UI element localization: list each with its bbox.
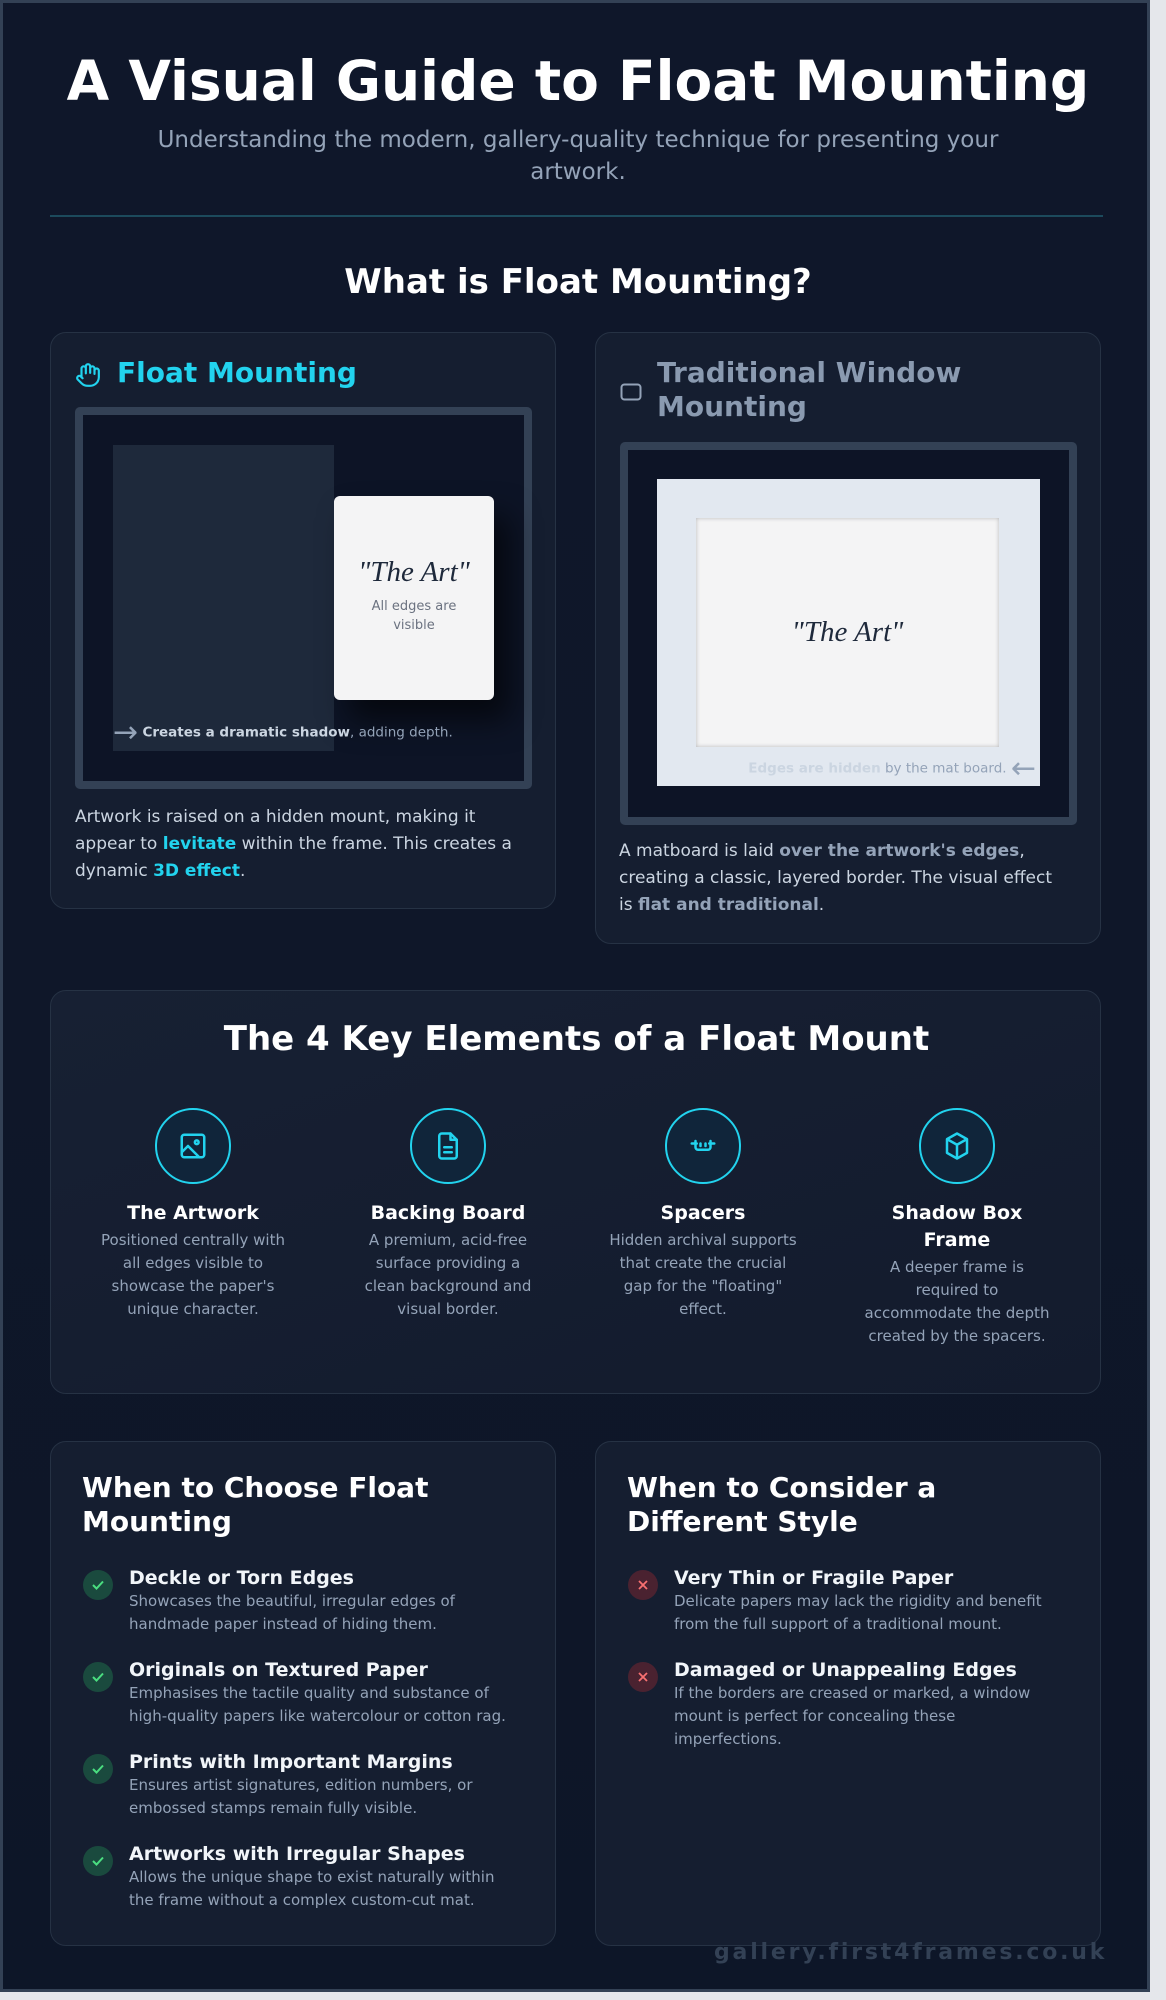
item: irregular (83, 1843, 494, 1909)
arrow label: Edges are hidden by the mat board. ← (748, 751, 1036, 786)
heading: what is float mounting: What is Float Mounting? (344, 262, 812, 302)
subtitle: Understanding the modern, gallery-quality technique for presenting your artwork. (158, 127, 998, 185)
icon: hand (76, 363, 100, 387)
element: spacers: Hidden archival supports that create the crucial gap for the "floating" effect. (609, 1231, 797, 1318)
element: artwork: The Artwork (127, 1202, 259, 1224)
art card (334, 496, 494, 700)
item: thin paper (628, 1567, 1042, 1633)
element: artwork: Positioned centrally with all edges visible to showcase the paper's unique character. (101, 1231, 285, 1318)
panel: float mounting (50, 332, 556, 909)
panel: consider different style (595, 1441, 1101, 1946)
item: thin paper: Very Thin or Fragile Paper (674, 1567, 953, 1589)
panel: traditional window mounting (595, 332, 1101, 944)
item: damaged edges: Damaged or Unappealing Edges (674, 1659, 1017, 1681)
item: damaged edges (628, 1659, 1030, 1748)
item: deckle (83, 1567, 456, 1633)
heading: traditional: Traditional Window (657, 356, 961, 389)
element: spacers: Spacers (661, 1202, 745, 1224)
text block: Artwork is raised on a hidden mount, making it appear to levitate within the frame. This creates a dynamic 3D effect. (75, 807, 512, 881)
heading: float mounting: Float Mounting (117, 356, 357, 389)
item: deckle: Showcases the beautiful, irregular edges of handmade paper instead of hiding them. (129, 1592, 455, 1633)
element: backing board: A premium, acid-free surface providing a clean background and visual border. (365, 1231, 531, 1318)
item: irregular: Artworks with Irregular Shapes (129, 1843, 465, 1865)
item: irregular: Allows the unique shape to exist naturally within the frame without a complex custom-cut mat. (129, 1868, 494, 1909)
item: margins (83, 1751, 473, 1817)
diagram: float frame (75, 407, 532, 789)
diagram: window frame: "The Art" (792, 616, 903, 648)
heading (82, 1471, 428, 1538)
footer: gallery.first4frames.co.uk (714, 1940, 1107, 1965)
item: margins: Prints with Important Margins (129, 1751, 453, 1773)
element: spacers (609, 1108, 797, 1318)
art card: All edges are (372, 599, 456, 614)
heading: traditional: Mounting (657, 390, 807, 423)
element: shadow box frame: A deeper frame is required to accommodate the depth created by the spacers. (865, 1258, 1049, 1345)
item: margins: Ensures artist signatures, edition numbers, or embossed stamps remain fully visible. (129, 1776, 472, 1817)
item: thin paper: Delicate papers may lack the rigidity and benefit from the full support of a traditional mount. (674, 1592, 1042, 1633)
title: A Visual Guide to Float Mounting (67, 49, 1089, 113)
element: backing board (365, 1108, 531, 1318)
item: textured (83, 1659, 506, 1725)
panel: when to choose (50, 1441, 556, 1946)
element: shadow box frame: Frame (924, 1229, 990, 1251)
heading: Different Style (627, 1505, 858, 1538)
diagram: window frame (620, 442, 1077, 825)
item: textured: Originals on Textured Paper (129, 1659, 428, 1681)
item: textured: Emphasises the tactile quality and substance of high-quality papers like watercolour or cotton rag. (129, 1684, 506, 1725)
element: artwork (101, 1108, 285, 1318)
heading: Mounting (82, 1505, 232, 1538)
art card: "The Art" (358, 556, 470, 588)
heading (627, 1471, 936, 1538)
arrow label: → Creates a dramatic shadow, adding depth. (113, 715, 453, 750)
item: deckle: Deckle or Torn Edges (129, 1567, 354, 1589)
panel: key elements (50, 990, 1101, 1394)
heading: The 4 Key Elements of a Float Mount (224, 1019, 929, 1059)
element: shadow box frame: Shadow Box (892, 1202, 1022, 1224)
art card: visible (393, 618, 435, 633)
heading: traditional (657, 356, 961, 423)
element: shadow box frame (865, 1108, 1049, 1345)
heading: When to Consider a (627, 1471, 936, 1504)
text block: A matboard is laid over the artwork's edges, creating a classic, layered border. The visual effect is flat and traditional. (619, 841, 1052, 915)
item: damaged edges: If the borders are creased or marked, a window mount is perfect for concealing these imperfections. (674, 1684, 1030, 1748)
element: backing board: Backing Board (371, 1202, 525, 1224)
heading: When to Choose Float (82, 1471, 428, 1504)
icon: rectangle (620, 384, 642, 400)
